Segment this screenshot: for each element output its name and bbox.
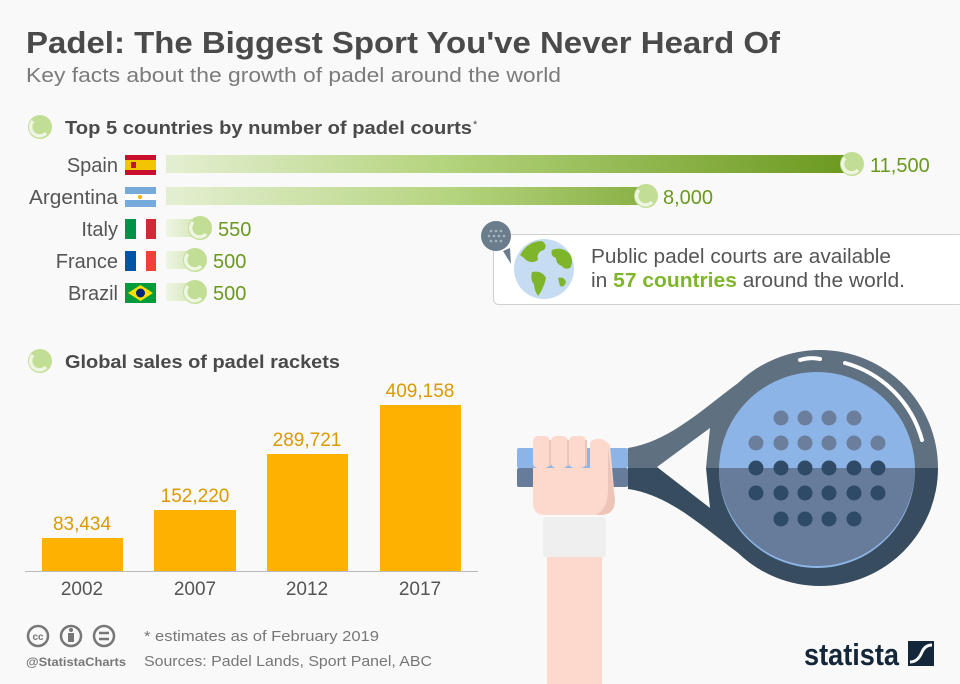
row: Spain: Spain	[67, 155, 118, 177]
section heading: courts: Top 5 countries by number of padel courts	[65, 118, 472, 138]
row: Italy	[81, 216, 251, 241]
row: France	[56, 248, 246, 273]
column chart: racket sales: 2007	[174, 579, 216, 600]
illustration: hand with racket	[517, 340, 950, 684]
row: Italy: 550	[218, 219, 251, 241]
row: Argentina	[29, 184, 713, 209]
column chart: racket sales: 2002	[61, 579, 103, 600]
callout: public courts: in 57 countries around the world.	[591, 270, 905, 292]
row: Brazil: Brazil	[68, 283, 118, 305]
bar chart: courts	[29, 152, 930, 305]
row: Argentina: 8,000	[663, 187, 713, 209]
title: Padel: The Biggest Sport You've Never Heard Of	[26, 25, 781, 60]
callout text: Public padel courts are available	[591, 246, 891, 268]
footer: notes: * estimates as of February 2019	[144, 628, 379, 645]
footer: handle: @StatistaCharts	[26, 655, 126, 669]
column chart: racket sales: 83,434	[53, 514, 111, 535]
footer: notes: Sources: Padel Lands, Sport Panel, ABC	[144, 653, 432, 670]
column chart: racket sales	[25, 381, 478, 600]
footer: notes	[144, 628, 432, 670]
column chart: racket sales: 2017	[399, 579, 441, 600]
row: Spain	[67, 152, 930, 177]
icon: small racket	[481, 221, 511, 264]
section heading: rackets: Global sales of padel rackets	[65, 352, 340, 372]
column chart: racket sales: 152,220	[161, 486, 229, 507]
grip	[517, 448, 628, 468]
callout: public courts	[481, 221, 960, 304]
section heading: courts: *	[473, 119, 478, 131]
row: Spain: 11,500	[870, 155, 930, 177]
row: Italy: Italy	[81, 219, 118, 241]
footer: license icons	[28, 626, 114, 646]
row: Brazil	[68, 280, 246, 305]
logo: statista: statista	[804, 637, 900, 672]
row: France: France	[56, 251, 118, 273]
fist	[533, 439, 615, 515]
column chart: racket sales: 409,158	[386, 381, 454, 402]
racket	[628, 350, 938, 586]
section heading: rackets	[28, 349, 340, 373]
section heading: courts	[28, 115, 478, 139]
row: France: 500	[213, 251, 246, 273]
column chart: racket sales: 289,721	[273, 430, 341, 451]
column chart: racket sales: 2012	[286, 579, 328, 600]
icon: globe	[514, 239, 574, 299]
subtitle: Key facts about the growth of padel around the world	[26, 65, 561, 87]
row: Brazil: 500	[213, 283, 246, 305]
footer: license icons: cc	[32, 632, 44, 643]
row: Argentina: Argentina	[29, 187, 119, 209]
